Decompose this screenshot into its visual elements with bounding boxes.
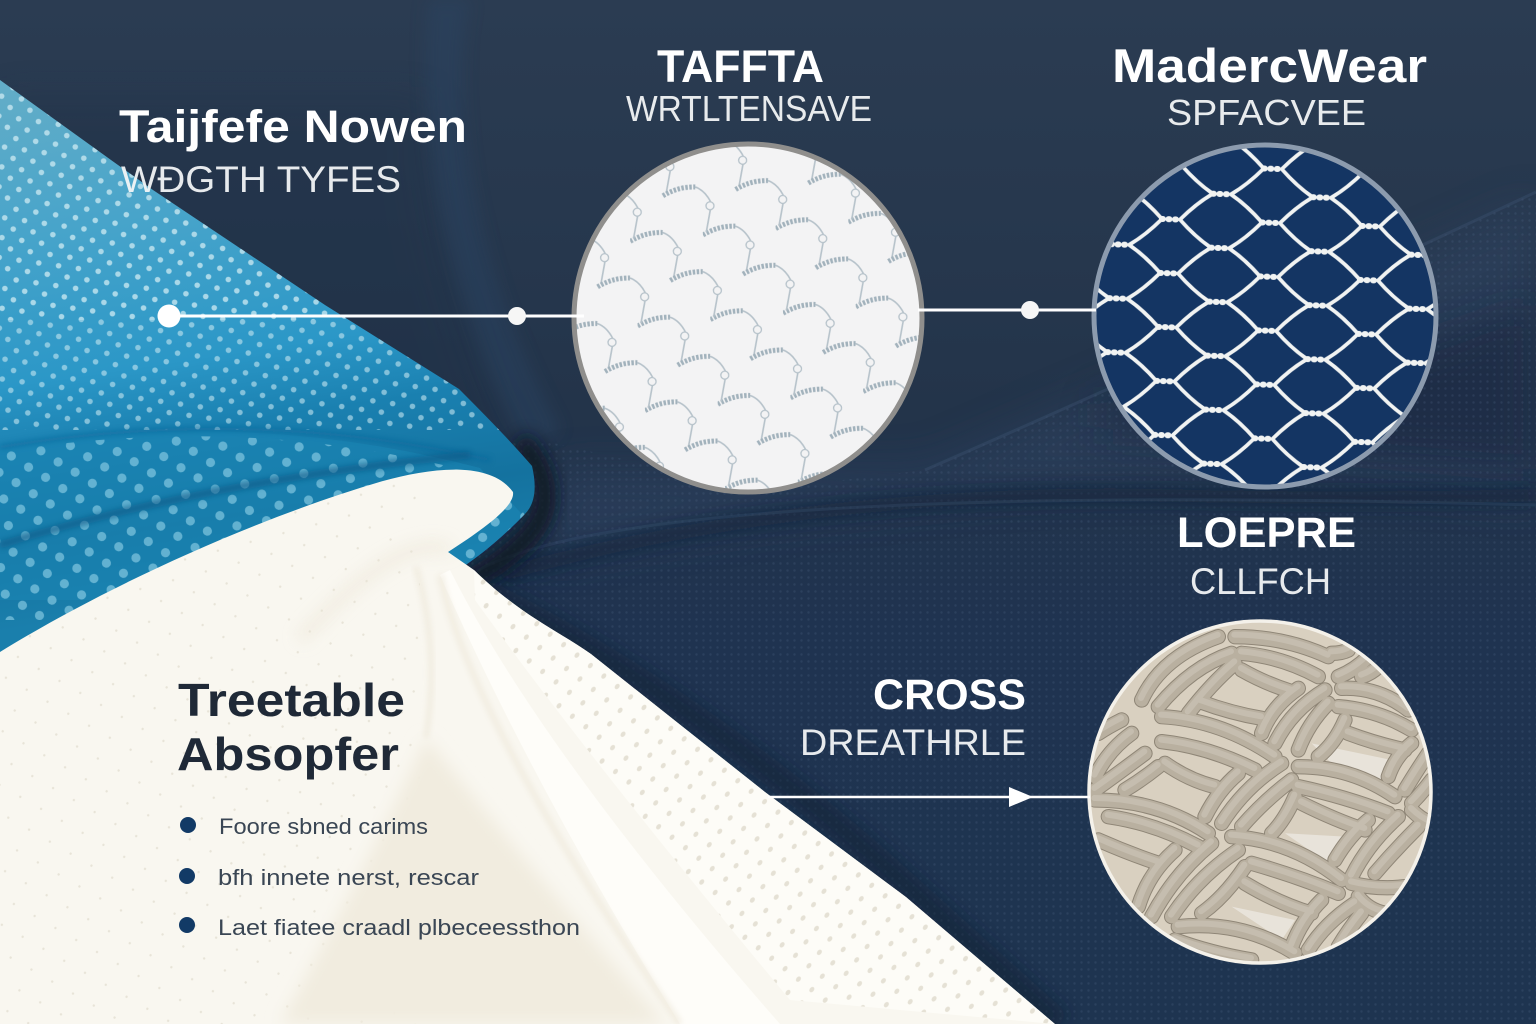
heading: MadercWear: SPFACVEE (1167, 92, 1366, 133)
heading: TAFFTA (626, 41, 872, 129)
heading: LOEPRE: LOEPRE (1177, 509, 1356, 557)
swatch: cross weave circle (1088, 620, 1432, 964)
heading: Treetable Absopfer: Absopfer (177, 728, 399, 780)
heading: Treetable Absopfer: Treetable (178, 674, 405, 726)
heading: LOEPRE: CLLFCH (1190, 561, 1331, 602)
panel: blue dotted fabric (0, 80, 535, 652)
heading: CROSS: DREATHRLE (800, 722, 1026, 763)
heading: CROSS: CROSS (873, 671, 1026, 719)
heading: MadercWear: MadercWear (1112, 39, 1427, 92)
swatch: taffta circle (570, 140, 930, 500)
heading: TAFFTA: WRTLTENSAVE (626, 88, 872, 129)
heading: LOEPRE (1177, 509, 1356, 602)
swatch: net circle (1090, 140, 1450, 500)
heading: Taijfefe Nowen (119, 101, 467, 200)
panel: white absorbent fabric (0, 450, 1100, 1024)
connector: blue fabric to taffta (158, 304, 584, 328)
heading: Taijfefe Nowen: Taijfefe Nowen (119, 101, 467, 152)
bullet list (179, 814, 580, 940)
heading: Taijfefe Nowen: WÐGTH TYFES (121, 159, 401, 200)
heading: Treetable Absopfer (177, 674, 405, 780)
bullet list: bfh innete nerst, rescar (218, 865, 479, 890)
heading: TAFFTA: TAFFTA (657, 41, 824, 92)
arrow: to cross swatch (768, 787, 1090, 807)
bullet list: Foore sbned carims (219, 814, 428, 839)
heading: MadercWear (1112, 39, 1427, 133)
connector: taffta to net (918, 301, 1096, 319)
bullet list: Laet fiatee craadl plbeceessthon (218, 915, 580, 940)
heading: CROSS (800, 671, 1026, 763)
